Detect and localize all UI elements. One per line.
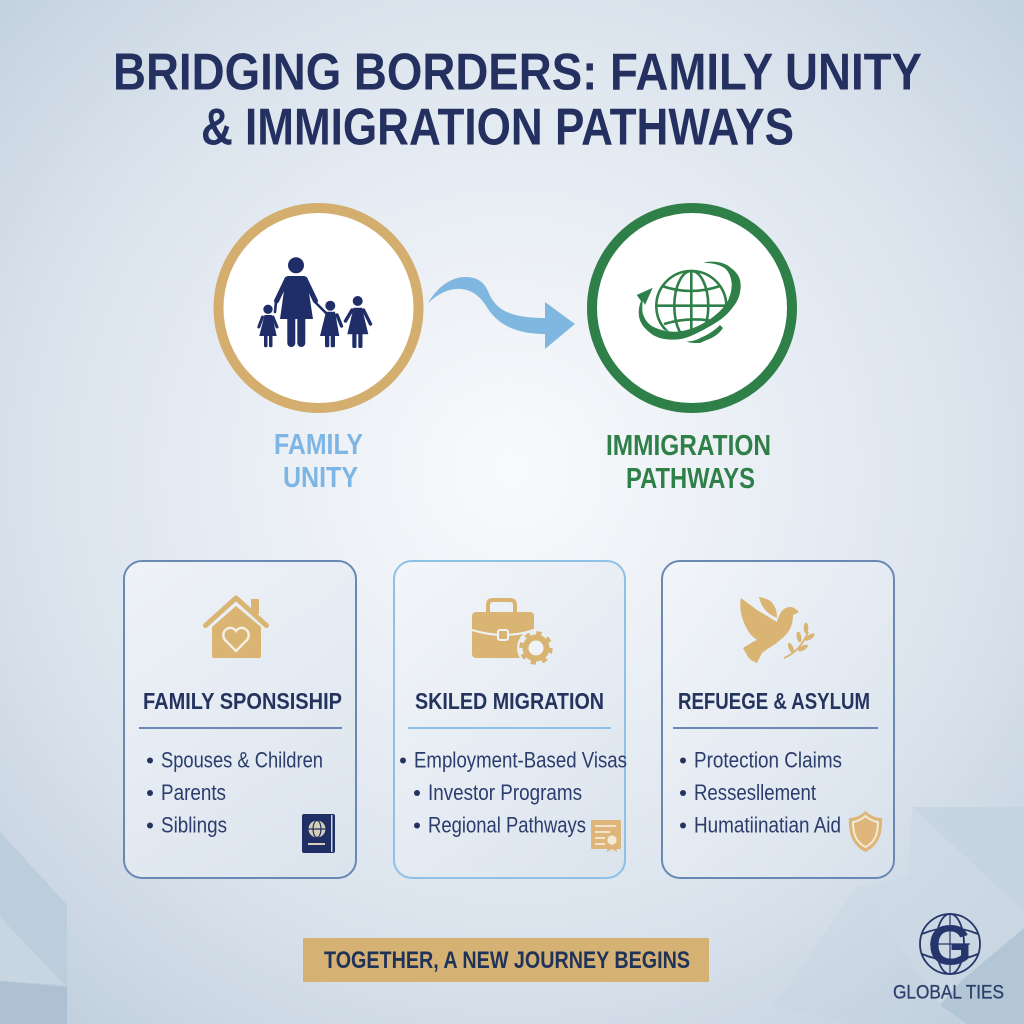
circle: immigration pathways: [592, 208, 792, 408]
list: refuge and asylum items: Protection Claims: [694, 747, 842, 772]
logo: global ties: GLOBAL TIES: [893, 982, 1004, 1004]
heading: refuge and asylum: REFUEGE & ASYLUM: [678, 688, 870, 714]
label: immigration pathways: PATHWAYS: [626, 463, 755, 495]
banner: closing message: [303, 938, 709, 982]
icon: shield: [849, 811, 882, 852]
banner: closing message: TOGETHER, A NEW JOURNEY BEGINS: [324, 947, 690, 974]
logo: global ties: G: [928, 914, 972, 978]
list: skilled migration items: Investor Programs: [428, 780, 582, 805]
panel: skilled migration: [394, 561, 627, 878]
list: family sponsorship items: [147, 747, 323, 837]
icon: passport: [302, 814, 335, 853]
heading: skilled migration: SKILED MIGRATION: [415, 688, 604, 714]
list: family sponsorship items: Spouses & Children: [161, 747, 323, 772]
list: family sponsorship items: Siblings: [161, 812, 227, 837]
logo: global ties: [893, 914, 1004, 1004]
title: & IMMIGRATION PATHWAYS: [201, 98, 794, 156]
label: immigration pathways: IMMIGRATION: [606, 430, 771, 462]
icon: dove with olive branch: [740, 597, 816, 663]
label: immigration pathways: [606, 430, 771, 495]
label: family unity: FAMILY: [274, 429, 363, 461]
icon: family holding hands: [259, 257, 370, 348]
heading: family sponsorship: FAMILY SPONSISHIP: [143, 688, 342, 714]
label: family unity: [274, 429, 363, 494]
panel: family sponsorship: [124, 561, 356, 878]
list: skilled migration items: Employment-Based Visas: [414, 747, 627, 772]
icon: briefcase with gear: [472, 600, 555, 667]
icon: certificate: [591, 820, 621, 852]
title: [113, 42, 922, 156]
arrow: family to immigration: [428, 277, 575, 349]
list: skilled migration items: [400, 747, 627, 837]
circle: family unity: [218, 208, 418, 408]
list: refuge and asylum items: Humatiinatian Aid: [694, 812, 841, 837]
icon: globe with swoosh: [637, 262, 741, 343]
list: refuge and asylum items: [680, 747, 842, 837]
panel: refuge and asylum: [662, 561, 894, 878]
icon: house with heart: [206, 598, 266, 658]
list: skilled migration items: Regional Pathways: [428, 812, 586, 837]
list: refuge and asylum items: Ressesllement: [694, 780, 816, 805]
label: family unity: UNITY: [283, 462, 358, 494]
title: BRIDGING BORDERS: FAMILY UNITY: [113, 42, 922, 100]
list: family sponsorship items: Parents: [161, 780, 226, 805]
